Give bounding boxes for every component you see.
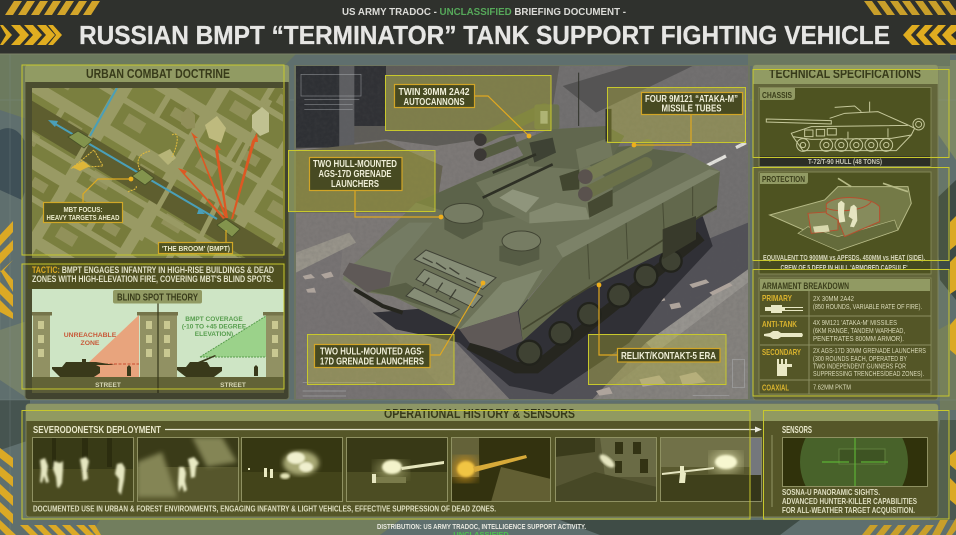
callout: missile tubes: FOUR 9M121 “ATAKA-M” [645,94,738,105]
building and rubble behind tank [296,66,559,149]
row: anti-tank: 4X 9M121 'ATAKA-M' MISSILES [813,318,897,327]
highlight: twin autocannons [386,76,551,130]
thermal image 1 [32,437,134,502]
mbt silhouette [52,359,115,377]
heading: severodonetsk deployment: SEVERODONETSK DEPLOYMENT [33,425,161,436]
buildings in diagram [32,312,284,377]
row: coaxial: COAXIAL [762,382,789,392]
subtitle: US ARMY TRADOC - UNCLASSIFIED BRIEFING DOCUMENT - [342,6,626,18]
callout: lower grenade launchers: TWO HULL-MOUNTED AGS- [320,346,424,358]
highlight: protection [753,168,949,260]
highlight: relikt era [588,334,726,384]
callout: missile tubes: MISSILE TUBES [662,104,722,114]
highlight: tactic [22,264,284,389]
blind spot theory diagram: STREET [95,382,121,389]
buildings [158,107,269,165]
footer distribution: DISTRIBUTION: US ARMY TRADOC, INTELLIGENCE SUPPORT ACTIVITY. [377,522,586,531]
row: primary [762,293,922,313]
blind spot tag [113,290,202,304]
row: primary: (850 ROUNDS, VARIABLE RATE OF FIRE). [813,302,922,311]
callout: twin autocannons [394,84,531,138]
callout: hull grenade launchers: LAUNCHERS [331,179,379,190]
label: the broom [158,230,232,254]
sensors caption: FOR ALL-WEATHER TARGET ACQUISITION. [782,505,915,515]
blind spot theory diagram: BMPT COVERAGE [185,316,243,323]
header band [0,0,956,54]
highlight: sensors [764,410,949,519]
era plates on front [406,250,496,314]
unreachable zone [87,315,139,377]
hatch cupolas [443,203,541,266]
chassis card: CHASSIS [762,90,792,100]
panel: urban combat doctrine [20,65,300,400]
label: mbt focus: HEAVY TARGETS AHEAD [46,213,120,222]
row: secondary: SUPPRESSING TRENCHES/DEAD ZONES). [813,369,924,378]
autocannon barrels [483,154,553,198]
callout: missile tubes [632,92,742,147]
chevrons left [0,25,62,45]
tank shadow [373,216,713,394]
blind spot theory diagram: UNREACHABLE [64,332,117,339]
blind spot theory diagram: ELEVATION) [195,331,233,338]
highlight: operational history [22,410,750,519]
road and pavement [296,66,748,399]
thermal image 3 [241,437,343,502]
label: mbt focus: MBT FOCUS: [64,205,102,214]
callout: lower grenade launchers [314,281,485,368]
row: primary: PRIMARY [762,293,792,303]
highlight: chassis [753,70,949,158]
row: secondary: SECONDARY [762,347,801,357]
callout: hull grenade launchers: AGS-17D GRENADE [318,169,392,180]
rubble [303,272,733,396]
row: secondary: (300 ROUNDS EACH, OPERATED BY [813,354,907,363]
armament breakdown table [759,278,931,394]
row: coaxial [762,382,851,392]
blind spot theory diagram: (-10 TO +45 DEGREE [182,324,247,330]
thermal image 5 [451,437,551,502]
highlight: missile tubes [608,88,746,142]
hazard stripes: top right [864,1,956,15]
callout: hull grenade launchers: TWO HULL-MOUNTED [313,159,397,170]
sensors caption: SOSNA-U PANORAMIC SIGHTS. [782,487,880,497]
icon: protection cutaway [770,178,911,251]
callout: relikt era [597,283,720,362]
protection card [759,172,931,274]
hazard stripes: bottom left corner [0,448,101,535]
heading: technical specifications: TECHNICAL SPECIFICATIONS [769,67,921,81]
footer distribution [377,522,586,535]
heading: sensors: SENSORS [782,425,812,436]
hud overlays [301,74,744,396]
hazard stripes: bottom right corner [862,518,956,535]
row: primary: 2X 30MM 2A42 [813,294,854,303]
title: RUSSIAN BMPT “TERMINATOR” TANK SUPPORT FIGHTING VEHICLE [79,20,890,50]
highlight: hull grenade launchers [288,150,435,212]
heading: urban combat doctrine: URBAN COMBAT DOCTRINE [86,67,230,81]
deployment caption: DOCUMENTED USE IN URBAN & FOREST ENVIRONMENTS, ENGAGING INFANTRY & LIGHT VEHICLES, EFFECTIVE SUPPRESSION OF DEAD ZONES. [33,504,496,514]
tactic text: TACTIC: BMPT ENGAGES INFANTRY IN HIGH-RISE BUILDINGS & DEAD [32,264,274,275]
mbt blind spot zones [72,134,177,192]
armament breakdown table: ARMAMENT BREAKDOWN [762,281,849,291]
thermal image 7 [660,437,762,502]
callout: hull grenade launchers [310,158,443,219]
protection card: PROTECTION [762,174,805,184]
row: secondary: TWO INDEPENDENT GUNNERS FOR [813,362,906,370]
tactic text: ZONES WITH HIGH-ELEVATION FIRE, COVERING MBT'S BLIND SPOTS. [32,273,273,284]
far missile tubes [474,104,559,161]
hull side [519,171,720,341]
tactic text [28,259,286,289]
icon: t-72 hull line drawing [766,102,924,151]
callout: twin autocannons: TWIN 30MM 2A42 [398,87,470,98]
timeline arrow [165,426,762,432]
front fenders [343,223,543,351]
hazard stripes: right edge [950,216,956,505]
track and wheels [354,236,701,368]
hull top [346,146,720,329]
callout: lower grenade launchers: 17D GRENADE LAUNCHERS [320,356,424,368]
sensors divider [771,435,773,507]
sensor scope image [782,437,928,487]
red fire arrows [178,132,258,219]
callout: twin autocannons: AUTOCANNONS [404,97,465,108]
row: anti-tank [762,318,905,343]
map [32,88,283,258]
row: coaxial: 7.62MM PKTM [813,382,851,392]
hazard stripes: top left [5,1,100,15]
turret [476,126,624,223]
tanks on map [68,131,240,237]
chassis card: T-72/T-90 HULL (48 TONS) [808,159,882,166]
callout: relikt era: RELIKT/KONTAKT-5 ERA [621,351,716,362]
chevrons right [903,25,956,45]
heading: operational history: OPERATIONAL HISTORY & SENSORS [384,407,575,421]
row: secondary [762,346,926,378]
blind spot divider [157,300,159,393]
blind spot theory diagram: STREET [220,382,246,389]
near missile tubes [578,145,648,201]
bmpt silhouette [177,355,222,377]
panel: operational history and sensors [26,404,938,517]
blue advance arrows [48,88,217,219]
highlight: lower grenade launchers [308,334,454,384]
soldiers [127,365,258,376]
thermal image 6 [555,437,657,502]
label: mbt focus [44,177,133,222]
thermal image 4 [346,437,448,502]
sensors caption [782,487,917,515]
blind spot theory diagram: ZONE [81,340,100,347]
hazard stripes: left edge [0,221,13,319]
row: anti-tank: PENETRATES 800MM ARMOR). [813,334,904,343]
highlight: urban doctrine [22,65,284,255]
chassis card [759,88,931,166]
thermal image 2 [137,437,239,502]
row: anti-tank: (6KM RANGE, TANDEM WARHEAD, [813,326,905,335]
bmpt coverage zone [200,316,266,357]
blind spot theory diagram: BLIND SPOT THEORY [117,292,198,304]
label: the broom: 'THE BROOM' (BMPT) [162,244,230,253]
protection card: CREW OF 5 DEEP IN HULL 'ARMORED CAPSULE' [780,265,908,272]
row: secondary: 2X AGS-17D 30MM GRENADE LAUNCHERS [813,346,926,355]
panel: technical specifications [753,65,938,400]
row: anti-tank: ANTI-TANK [762,319,798,329]
panel: tank photo [294,65,750,400]
blind spot theory diagram [32,289,284,393]
highlight: armament [753,270,949,396]
